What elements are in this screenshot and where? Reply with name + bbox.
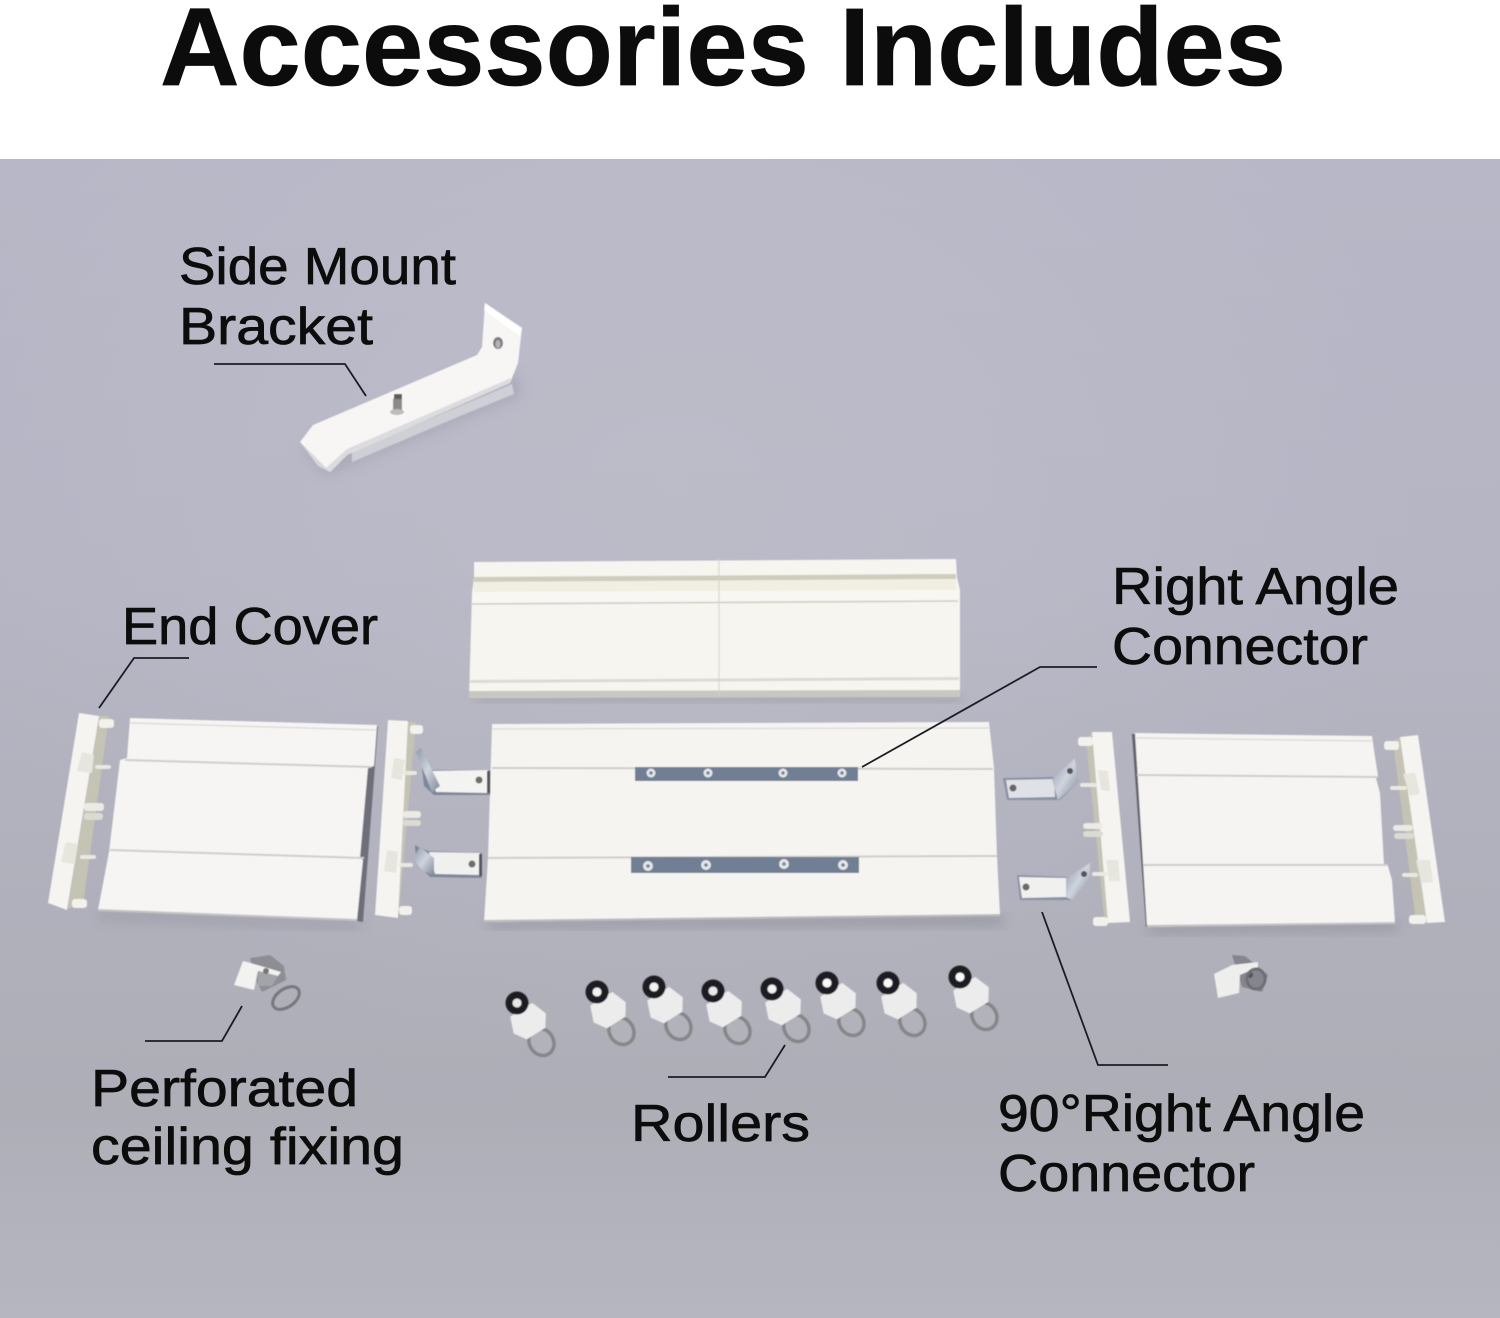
label: right angle connector: Right Angle — [1112, 558, 1399, 616]
icon: roller 7 — [866, 963, 936, 1044]
label: end cover: End Cover — [122, 598, 378, 656]
icon: perforated ceiling fixing, left — [234, 955, 303, 1014]
label: 90 degree right angle connector — [998, 1085, 1365, 1203]
icon: end cover, right inner — [1078, 732, 1130, 926]
callout line: end cover — [99, 658, 189, 708]
icon: roller 6 — [805, 963, 875, 1044]
label: side mount bracket: Bracket — [179, 298, 374, 356]
top rail section — [469, 559, 962, 702]
icon: right angle connector, upper — [1003, 758, 1078, 800]
label: 90 degree right angle connector: Connector — [998, 1145, 1255, 1203]
right rail section — [1132, 733, 1399, 934]
icon: roller 4 — [691, 971, 761, 1052]
callout line: 90 degree connector — [1042, 912, 1168, 1065]
icon: roller 2 — [575, 972, 645, 1053]
icon: roller 5 — [750, 969, 820, 1050]
label: side mount bracket — [179, 238, 457, 356]
label: 90 degree right angle connector: 90°Right Angle — [998, 1085, 1365, 1143]
icon: left angle connector, upper — [416, 748, 490, 795]
icon: roller 3 — [632, 967, 702, 1048]
icon: left angle connector, lower — [413, 845, 482, 878]
callout line: perforated ceiling fixing — [145, 1006, 242, 1041]
icon: side mount bracket — [300, 303, 522, 476]
left rail section — [98, 718, 378, 928]
center rail with connector plates — [484, 722, 1004, 928]
icon: end cover, far left — [48, 713, 114, 910]
label: right angle connector: Connector — [1112, 618, 1368, 676]
icon: perforated ceiling fixing, right — [1214, 955, 1268, 998]
icon: end cover, far right — [1384, 735, 1445, 924]
label: side mount bracket: Side Mount — [179, 238, 457, 296]
label: rollers: Rollers — [631, 1095, 810, 1153]
icon: roller 8 — [938, 957, 1008, 1038]
rollers — [495, 957, 1008, 1064]
callout line: side mount bracket — [214, 364, 366, 396]
icon: roller 1 — [495, 983, 565, 1064]
right angle connector plate, upper — [635, 767, 858, 781]
label: perforated ceiling fixing: ceiling fixing — [91, 1118, 404, 1176]
callout line: rollers — [668, 1045, 785, 1077]
label: perforated ceiling fixing: Perforated — [91, 1060, 358, 1118]
icon: right angle connector, lower — [1017, 863, 1090, 900]
right angle connector plate, lower — [631, 857, 859, 873]
label: perforated ceiling fixing — [91, 1060, 404, 1176]
label: right angle connector — [1112, 558, 1399, 676]
callout line: right angle connector — [862, 667, 1097, 767]
icon: end cover, left inner — [375, 720, 423, 918]
